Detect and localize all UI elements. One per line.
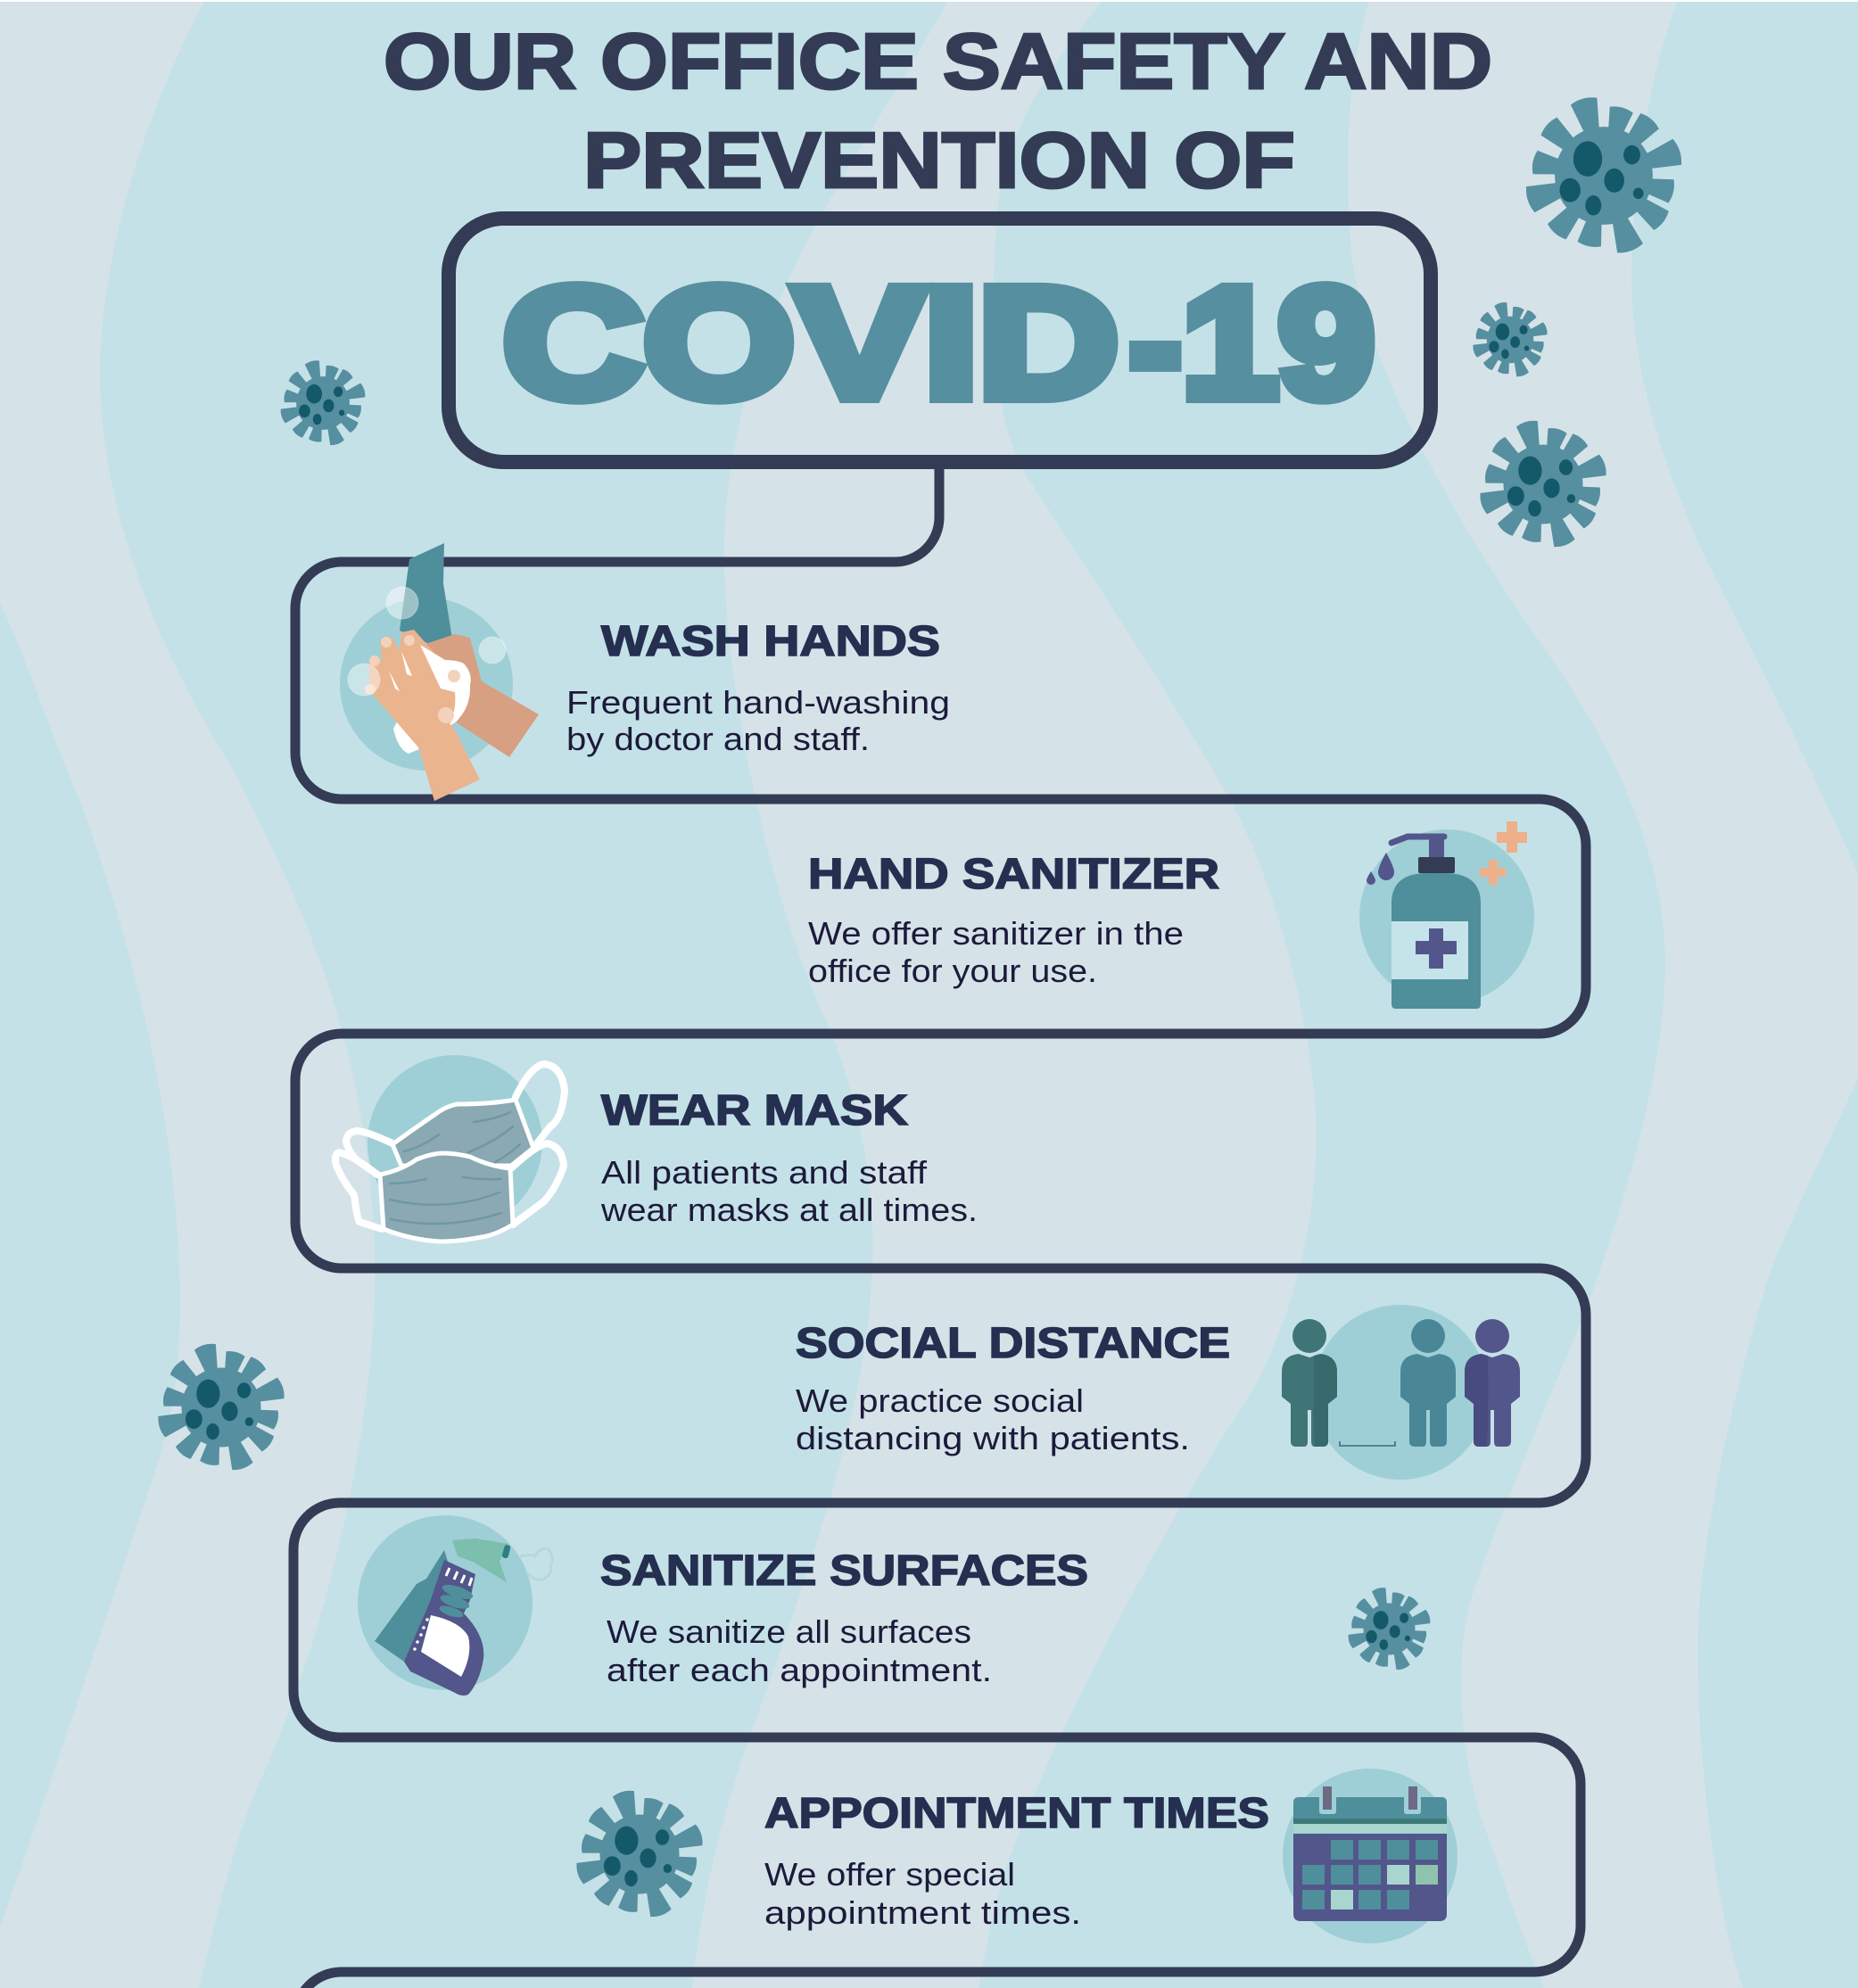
- covid-19 badge: COVID: [503, 256, 1119, 431]
- icon: virus large top right: [1524, 95, 1684, 255]
- text: sanitize surfaces description: after each appointment.: [607, 1652, 992, 1688]
- covid-19 badge: 19: [1182, 256, 1375, 431]
- icon: spray bottle: [358, 1515, 552, 1695]
- panel: social distance: [796, 1305, 1520, 1480]
- heading: wear mask: WEAR MASK: [601, 1087, 908, 1134]
- text: social distance description: distancing with patients.: [796, 1420, 1190, 1456]
- heading: appointment times: APPOINTMENT TIMES: [764, 1790, 1269, 1837]
- icon: sanitizer bottle: [1359, 821, 1534, 1009]
- panel: hand sanitizer: [808, 821, 1534, 1009]
- icon: virus medium right: [1478, 419, 1608, 549]
- text: social distance description: [796, 1382, 1190, 1456]
- heading: wash hands: WASH HANDS: [601, 618, 940, 665]
- title: PREVENTION OF: [583, 116, 1295, 204]
- text: wear mask description: wear masks at all times.: [600, 1192, 978, 1228]
- heading: social distance: SOCIAL DISTANCE: [796, 1320, 1230, 1367]
- icon: face masks: [335, 1055, 565, 1241]
- text: appointment times description: [764, 1856, 1081, 1931]
- title: OUR OFFICE SAFETY AND: [384, 17, 1492, 105]
- heading: sanitize surfaces: SANITIZE SURFACES: [600, 1547, 1088, 1595]
- covid-19 badge: [449, 219, 1431, 462]
- text: appointment times description: We offer special: [764, 1856, 1015, 1893]
- text: wash hands description: by doctor and staff.: [566, 721, 870, 757]
- serpentine connector line forming the step panels: [293, 464, 1586, 1988]
- title: [384, 17, 1492, 204]
- heading: hand sanitizer: HAND SANITIZER: [808, 851, 1219, 898]
- icon: virus small right of badge: [1472, 301, 1548, 378]
- text: hand sanitizer description: We offer sanitizer in the: [808, 915, 1184, 952]
- panel: sanitize surfaces: [358, 1515, 1088, 1695]
- text: wear mask description: [600, 1154, 978, 1228]
- icon: calendar: [1283, 1769, 1457, 1943]
- panel: wear mask: [335, 1055, 978, 1241]
- panel: wash hands: [340, 543, 950, 801]
- icon: people keeping distance: [1282, 1305, 1520, 1480]
- icon: virus left of badge: [279, 359, 367, 447]
- text: sanitize surfaces description: [607, 1613, 992, 1688]
- text: hand sanitizer description: [808, 915, 1184, 989]
- icon: virus in sanitize panel: [1347, 1587, 1432, 1671]
- text: hand sanitizer description: office for your use.: [808, 953, 1097, 989]
- icon: virus lower left: [156, 1342, 286, 1472]
- text: wash hands description: [566, 684, 950, 757]
- covid-19 badge: -: [1129, 256, 1182, 431]
- text: appointment times description: appointment times.: [764, 1894, 1081, 1931]
- panel: appointment times: [764, 1769, 1457, 1943]
- icon: virus in appointment panel: [574, 1789, 705, 1918]
- text: social distance description: We practice social: [796, 1382, 1084, 1419]
- icon: washing hands: [340, 543, 539, 801]
- text: wear mask description: All patients and staff: [601, 1154, 928, 1191]
- text: sanitize surfaces description: We sanitize all surfaces: [607, 1613, 971, 1650]
- text: wash hands description: Frequent hand-washing: [566, 684, 950, 721]
